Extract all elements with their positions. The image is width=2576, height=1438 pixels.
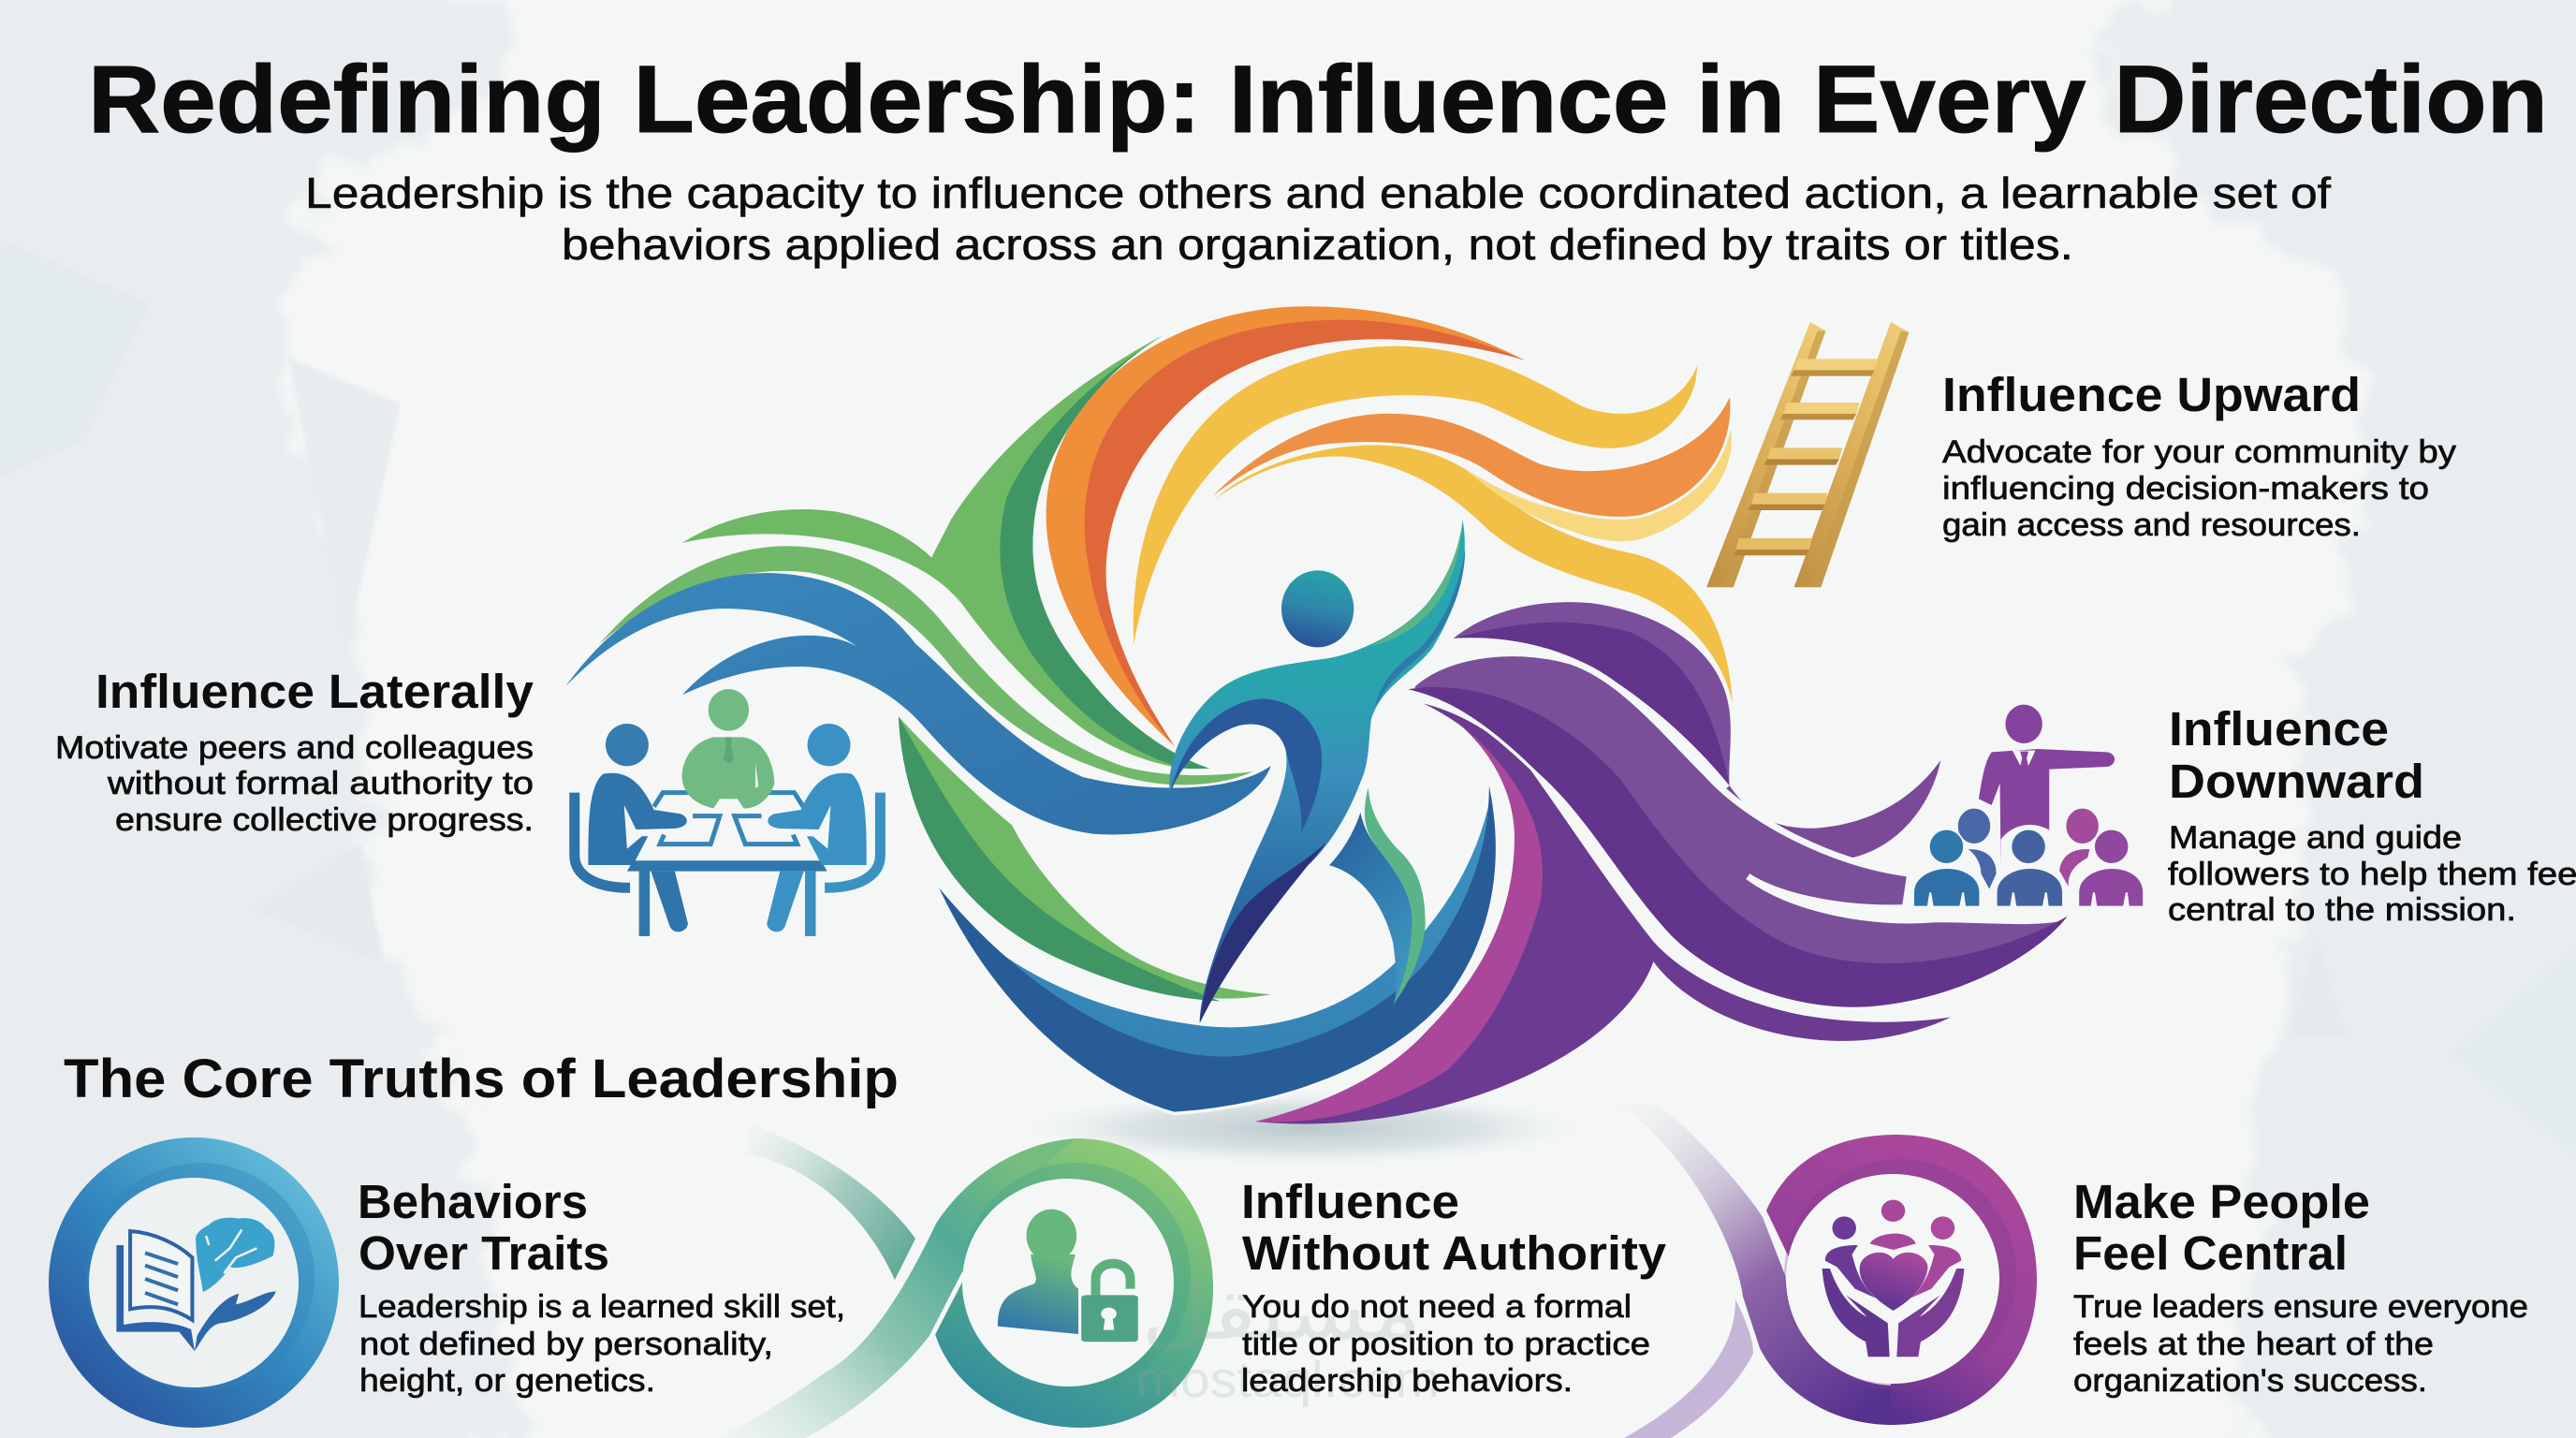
ring: blue xyxy=(49,1137,339,1428)
person: left xyxy=(575,724,688,932)
central figure xyxy=(1169,520,1465,1023)
icon: ladder xyxy=(1706,322,1909,587)
text: influence laterally: Motivate peers and colleagues xyxy=(55,730,534,766)
connector ribbons xyxy=(747,1123,1753,1438)
text: influence without authority: title or position to practice xyxy=(1242,1327,1650,1362)
text: influence laterally: without formal authority to xyxy=(107,766,534,801)
person: right xyxy=(767,724,880,932)
text: influence upward: influencing decision-makers to xyxy=(1942,471,2429,506)
text: influence downward: Influence xyxy=(2169,702,2389,756)
watermark: مستقل xyxy=(1141,1268,1422,1356)
panel: make people feel central xyxy=(1618,1105,2528,1425)
text: influence downward: central to the mission. xyxy=(2168,892,2516,928)
text: make people feel central: organization's success. xyxy=(2073,1363,2427,1399)
icon: book with brain and hand xyxy=(116,1218,276,1351)
panel: behaviors over traits xyxy=(49,1137,845,1428)
text: influence without authority: Influence xyxy=(1241,1175,1459,1228)
text: influence upward: Advocate for your community by xyxy=(1942,434,2456,470)
swirl: lower green and blue ribbons xyxy=(899,716,1496,1112)
text: make people feel central: Feel Central xyxy=(2073,1226,2348,1280)
watermark: mostaql.com xyxy=(1135,1352,1440,1408)
watermark xyxy=(1135,1268,1440,1408)
heading: core truths: The Core Truths of Leadership xyxy=(64,1049,899,1109)
text: influence downward: Downward xyxy=(2169,755,2424,808)
ring: purple xyxy=(1618,1105,2037,1425)
text: make people feel central: feels at the heart of the xyxy=(2073,1327,2434,1362)
subtitle: Leadership is the capacity to influence others and enable coordinated action, a learnable set of xyxy=(305,169,2331,217)
ring: green xyxy=(717,1138,1213,1438)
icon: people and heart in hands xyxy=(1822,1200,1964,1357)
text: make people feel central: Make People xyxy=(2073,1175,2370,1228)
title: Redefining Leadership: Influence in Every Direction xyxy=(88,46,2548,153)
text: make people feel central xyxy=(2073,1175,2528,1399)
text: behaviors over traits: Over Traits xyxy=(359,1226,609,1280)
text: influence downward xyxy=(2168,702,2576,928)
text: behaviors over traits: not defined by personality, xyxy=(359,1327,773,1362)
icon: person with open lock xyxy=(998,1210,1138,1342)
text: influence laterally: ensure collective progress. xyxy=(115,802,534,838)
text: influence upward: Influence Upward xyxy=(1942,368,2361,421)
text: influence upward xyxy=(1942,368,2456,543)
icon: leader with followers xyxy=(1913,705,2144,906)
text: influence without authority xyxy=(1241,1175,1667,1399)
figure second leg xyxy=(1329,787,1426,1005)
subtitle xyxy=(305,169,2331,269)
text: behaviors over traits: height, or genetics. xyxy=(359,1363,655,1399)
swirl: green and blue lateral ribbons xyxy=(565,335,1271,834)
figure head xyxy=(1281,570,1354,647)
central swirl xyxy=(565,306,2068,1123)
followers xyxy=(1913,808,2144,906)
swirl: orange and yellow upward ribbons xyxy=(1046,306,1733,746)
text: influence laterally xyxy=(55,665,534,838)
panel: influence without authority xyxy=(717,1138,1667,1438)
figure body xyxy=(1169,520,1465,1023)
text: behaviors over traits: Behaviors xyxy=(358,1175,588,1228)
person: centre xyxy=(682,689,774,808)
icon: team meeting xyxy=(575,689,880,936)
text: behaviors over traits: Leadership is a learned skill set, xyxy=(359,1289,845,1325)
text: influence laterally: Influence Laterally xyxy=(95,665,534,718)
text: influence downward: followers to help them feel xyxy=(2168,857,2576,892)
text: influence without authority: leadership behaviors. xyxy=(1241,1363,1573,1399)
text: influence without authority: Without Authority xyxy=(1242,1226,1667,1280)
text: influence upward: gain access and resources. xyxy=(1942,507,2361,543)
table and papers xyxy=(627,793,827,936)
text: make people feel central: True leaders ensure everyone xyxy=(2073,1289,2528,1325)
ground shadow xyxy=(1025,1091,1587,1166)
text: influence downward: Manage and guide xyxy=(2169,820,2462,856)
swirl: purple downward ribbons xyxy=(1255,602,2068,1123)
text: influence without authority: You do not need a formal xyxy=(1242,1289,1632,1325)
leader xyxy=(1979,705,2115,868)
subtitle: behaviors applied across an organization, not defined by traits or titles. xyxy=(562,220,2073,269)
text: behaviors over traits xyxy=(358,1175,845,1399)
